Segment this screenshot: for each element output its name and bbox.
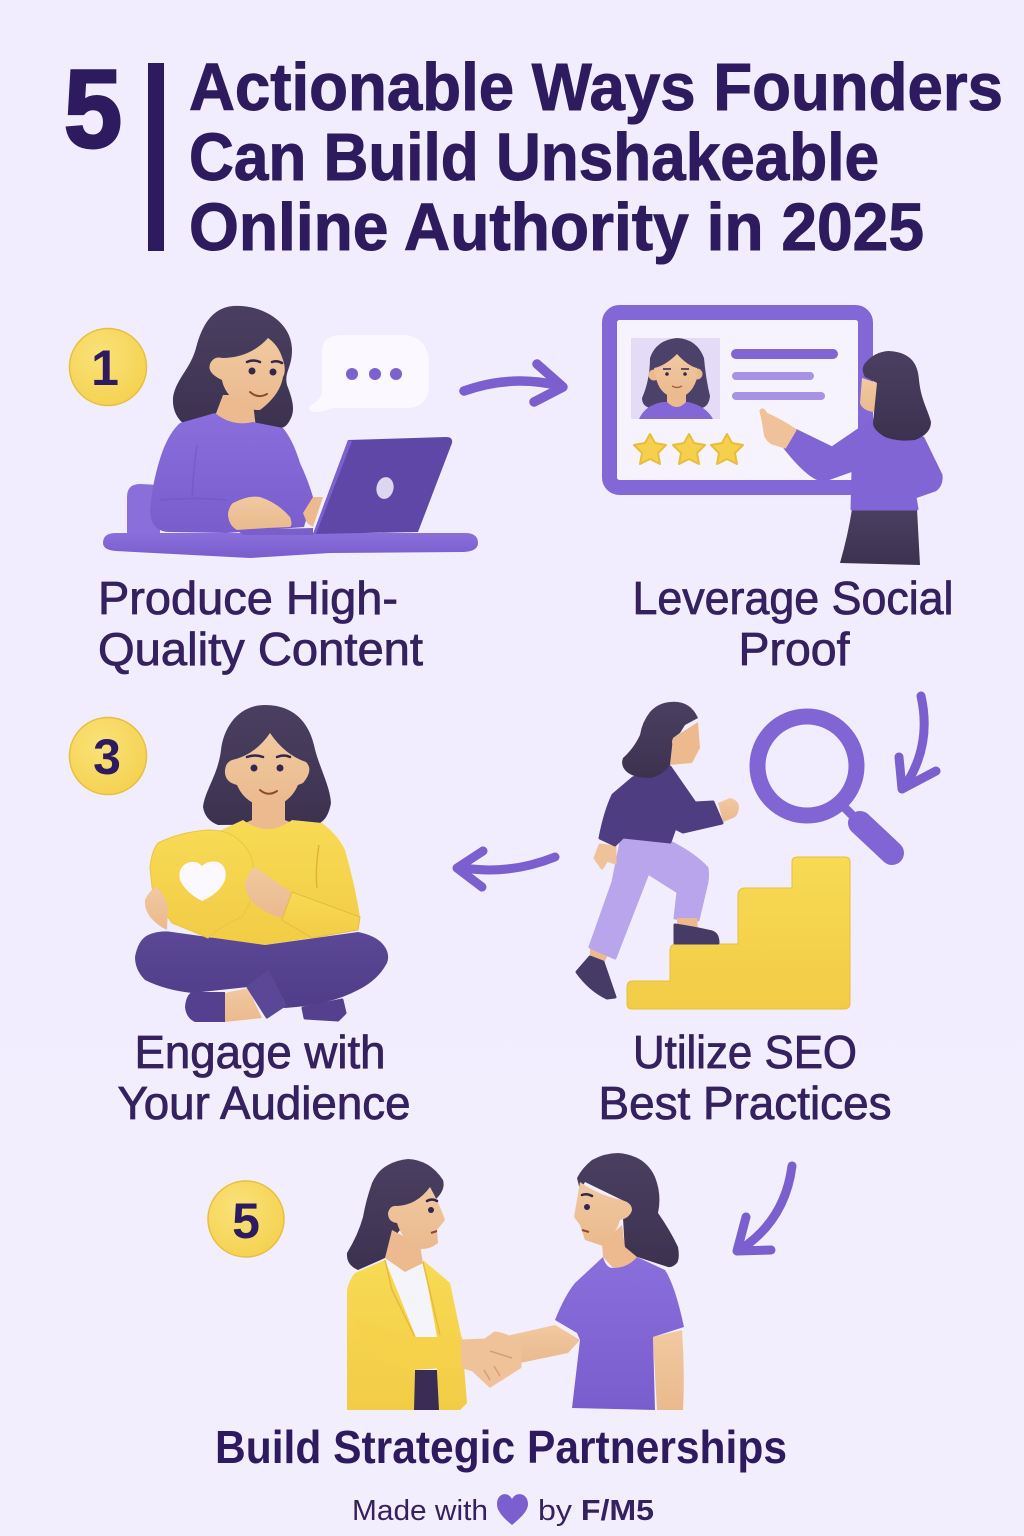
arrow: step 1 to step 2 bbox=[464, 364, 563, 402]
right woman arm to hand bbox=[502, 1325, 580, 1363]
sweater bbox=[150, 413, 313, 533]
right woman arm bbox=[653, 1330, 684, 1410]
step 1 illustration: woman at laptop bbox=[103, 306, 478, 558]
board bbox=[610, 312, 866, 488]
back foot bbox=[590, 947, 608, 965]
icon: speech bubble bbox=[309, 335, 429, 412]
arrow: step 4 to step 3 bbox=[457, 851, 555, 887]
step 2 illustration: presenter at review board bbox=[610, 312, 941, 565]
face bbox=[860, 378, 877, 414]
step 5 number badge bbox=[208, 1181, 284, 1257]
step 4 label: Utilize SEO bbox=[633, 1026, 857, 1078]
step 1 number badge: 1 bbox=[91, 340, 119, 396]
title: 5 bbox=[64, 48, 122, 171]
left woman hair bbox=[347, 1159, 444, 1270]
face bbox=[225, 733, 309, 808]
icon: heart bbox=[497, 1494, 528, 1525]
title: Online Authority in 2025 bbox=[189, 190, 924, 265]
right woman t-shirt bbox=[555, 1257, 684, 1410]
face bbox=[209, 338, 285, 410]
right foot bbox=[303, 1000, 345, 1020]
stars bbox=[634, 434, 743, 464]
title: Can Build Unshakeable bbox=[189, 120, 879, 195]
step 5 illustration: two women shaking hands bbox=[347, 1153, 684, 1410]
sweater bbox=[170, 820, 360, 945]
jacket sleeve bbox=[355, 1320, 463, 1370]
top bbox=[600, 767, 722, 845]
portrait bbox=[631, 338, 720, 419]
arrow: step 2 to step 4 bbox=[899, 696, 936, 789]
pants bbox=[590, 837, 708, 958]
hair bbox=[622, 702, 698, 778]
step 1 label line 2: Quality Content bbox=[98, 623, 423, 675]
handshake bbox=[462, 1333, 520, 1386]
right woman hair bbox=[577, 1153, 679, 1267]
step 4 illustration: climbing stairs with magnifier bbox=[577, 702, 892, 1009]
left woman neck bbox=[385, 1230, 423, 1272]
footer credit: by F/M5 bbox=[538, 1495, 654, 1527]
step 5 label: Build Strategic Partnerships bbox=[215, 1421, 787, 1473]
step 4 label line 2: Best Practices bbox=[598, 1077, 892, 1129]
front hand bbox=[718, 798, 739, 822]
stairs bbox=[627, 857, 850, 1009]
hair bbox=[863, 351, 931, 441]
skirt bbox=[840, 509, 920, 565]
title: Actionable Ways Founders bbox=[189, 50, 1003, 125]
arrow: step 4 to step 5 bbox=[737, 1166, 792, 1251]
left hand bbox=[145, 887, 168, 930]
step 2 label: Leverage Social bbox=[632, 572, 954, 624]
right woman face bbox=[574, 1182, 632, 1246]
step 3 illustration: woman holding heart bbox=[135, 705, 388, 1022]
front foot bbox=[677, 918, 698, 928]
ankle bbox=[225, 988, 262, 1022]
footer credit: Made with bbox=[352, 1495, 488, 1527]
title bbox=[64, 48, 1003, 265]
hand bbox=[761, 410, 795, 447]
face bbox=[670, 722, 700, 765]
back hand bbox=[595, 845, 615, 868]
hair bbox=[203, 705, 331, 825]
white top bbox=[385, 1258, 440, 1375]
hands bbox=[303, 497, 323, 527]
heart bbox=[179, 862, 226, 901]
legs bbox=[135, 931, 388, 1008]
sleeve bbox=[282, 892, 360, 938]
dark shirt bbox=[414, 1370, 439, 1410]
right woman neck bbox=[602, 1225, 637, 1269]
step 1 label: Produce High- bbox=[98, 572, 398, 624]
step 3 number badge bbox=[70, 718, 146, 794]
review lines bbox=[731, 349, 838, 359]
desk bbox=[103, 533, 478, 558]
step 2 label line 2: Proof bbox=[738, 623, 850, 675]
cuff bbox=[248, 972, 285, 1017]
neck bbox=[245, 800, 292, 832]
step 1 number badge bbox=[70, 328, 146, 406]
laptop base bbox=[237, 528, 313, 535]
heart bubble bbox=[150, 830, 254, 938]
left foot bbox=[185, 992, 225, 1022]
neck bbox=[212, 395, 256, 428]
laptop screen bbox=[313, 437, 452, 534]
chair bbox=[127, 484, 160, 535]
jacket left bbox=[347, 1260, 415, 1410]
jacket right bbox=[423, 1260, 467, 1410]
left woman face bbox=[388, 1187, 445, 1249]
step 3 label line 2: Your Audience bbox=[118, 1077, 410, 1129]
blouse and arm bbox=[785, 420, 941, 509]
step 5 number badge: 5 bbox=[232, 1193, 260, 1249]
step 3 label: Engage with bbox=[134, 1026, 386, 1078]
step 3 number badge: 3 bbox=[93, 729, 121, 785]
magnifier bbox=[758, 716, 892, 853]
hair bbox=[173, 306, 293, 428]
footer credit bbox=[352, 1494, 654, 1527]
right hand bbox=[245, 867, 292, 918]
